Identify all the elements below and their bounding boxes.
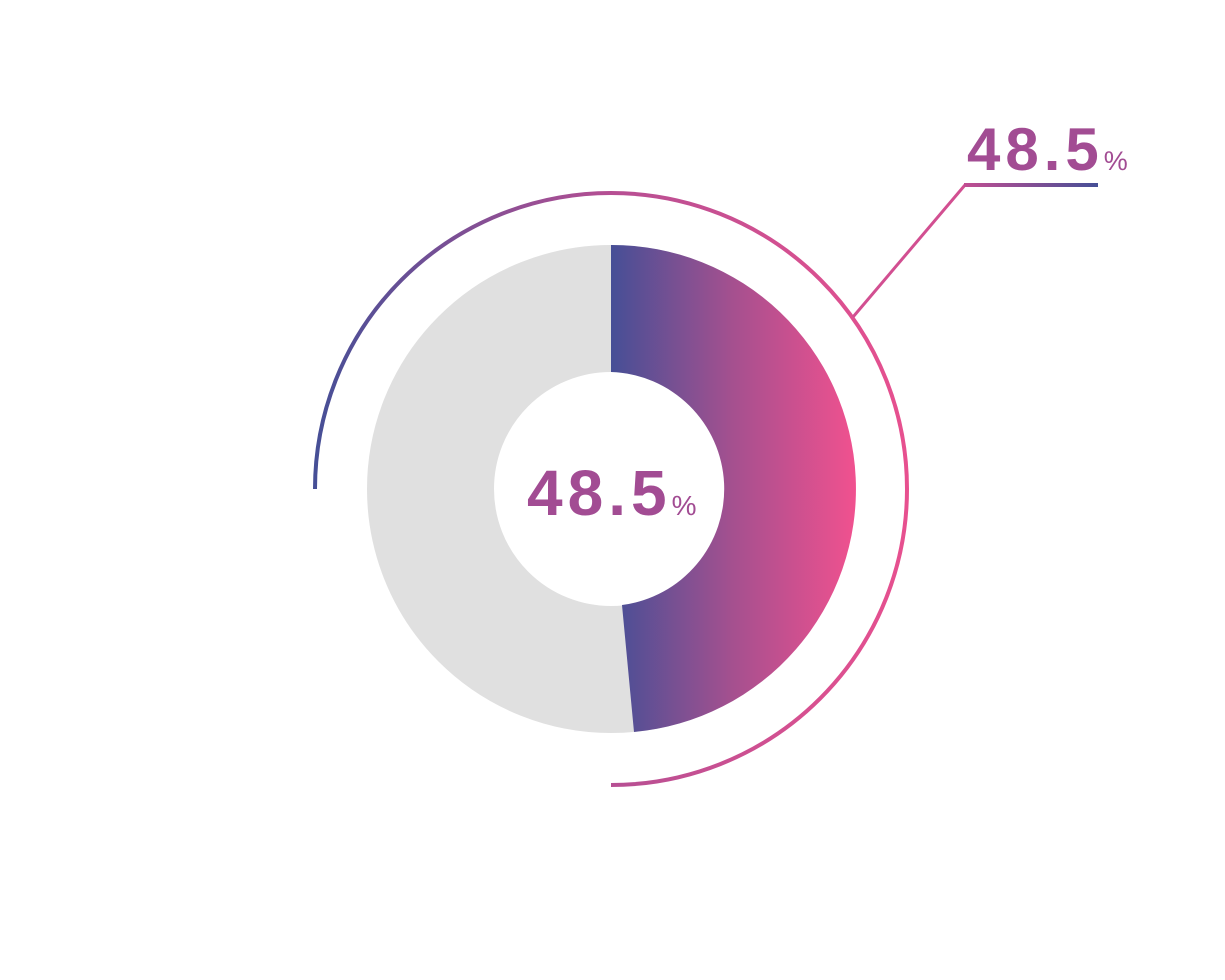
callout value label: 48.5% (967, 116, 1128, 183)
center value label: 48.5% (527, 457, 696, 529)
donut chart (430, 245, 856, 732)
leader line (853, 185, 1098, 317)
grey remainder segment (430, 308, 792, 670)
outer arc (315, 193, 907, 785)
coloured 48.5% segment (611, 245, 856, 732)
